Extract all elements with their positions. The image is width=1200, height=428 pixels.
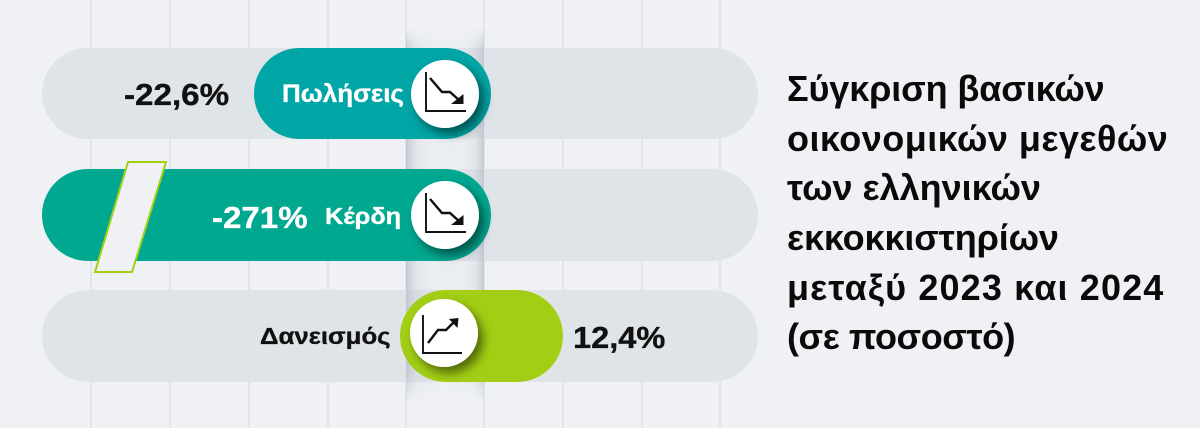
- central zero band shadow: [406, 28, 484, 402]
- track: row 1: [42, 48, 758, 139]
- label: sales: Πωλήσεις: [282, 80, 404, 108]
- icon: profits trending down: [411, 181, 479, 249]
- bar: profits: [42, 169, 491, 261]
- track: row 2: [42, 169, 758, 261]
- title: εκκοκκιστηρίων: [787, 217, 1059, 258]
- title: των ελληνικών: [787, 167, 1041, 208]
- title: οικονομικών μεγεθών: [787, 118, 1168, 159]
- value: lending 12,4%: 12,4%: [573, 320, 665, 355]
- chart: comparison bars: [42, 32, 758, 396]
- title: Σύγκριση βασικών: [787, 68, 1105, 109]
- track: row 3: [42, 290, 758, 382]
- bar: sales: [254, 48, 491, 139]
- title: [787, 68, 1168, 357]
- icon: lending trending up: [410, 299, 478, 367]
- value: sales -22,6%: -22,6%: [124, 77, 229, 112]
- value: profits -271%: -271%: [212, 200, 308, 235]
- title: μεταξύ 2023 και 2024: [787, 267, 1164, 308]
- axis break marker: [95, 162, 166, 272]
- label: profits: Κέρδη: [325, 203, 401, 229]
- bar: lending: [400, 290, 563, 382]
- title: (σε ποσοστό): [787, 316, 1015, 357]
- icon: sales trending down: [411, 60, 479, 128]
- label: lending: Δανεισμός: [260, 323, 391, 349]
